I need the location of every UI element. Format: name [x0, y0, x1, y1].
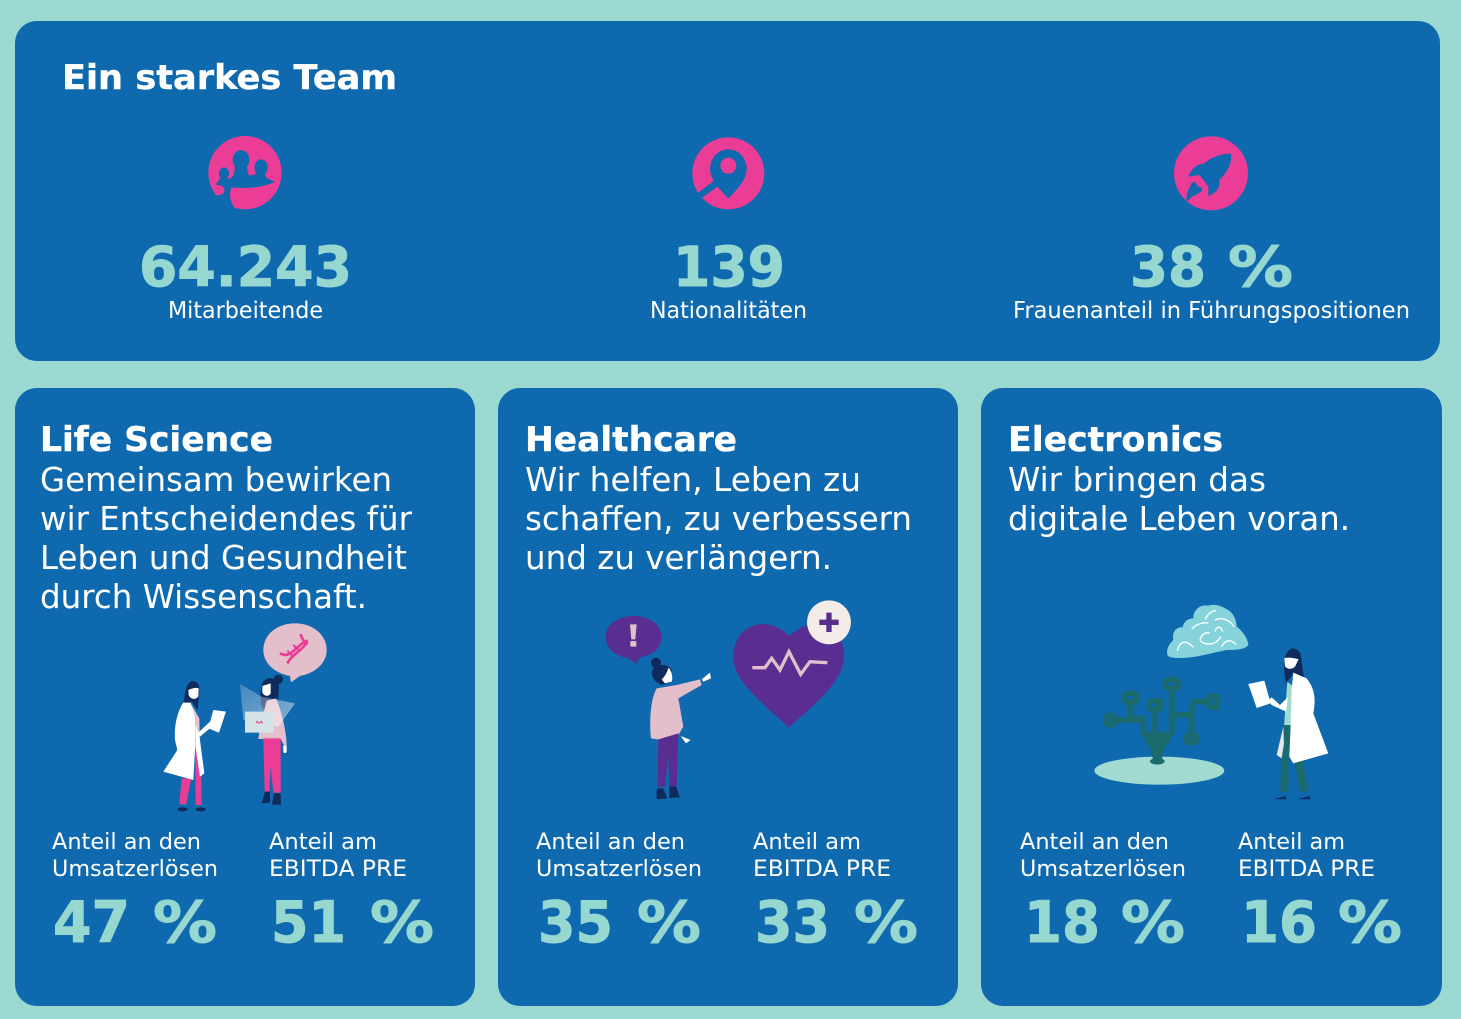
stat: EBITDA share: %: [1338, 890, 1402, 956]
stat: women in leadership: 38: [1130, 235, 1206, 299]
stat: revenue share: Umsatzerlösen: [52, 857, 218, 882]
body text: digitale Leben voran.: [1008, 499, 1350, 538]
stat: EBITDA share: 16: [1241, 890, 1317, 956]
title: Ein starkes Team: [62, 58, 397, 98]
stat: EBITDA share: Anteil am: [269, 830, 377, 855]
body text: [40, 460, 412, 616]
stat: EBITDA share: EBITDA PRE: [1238, 857, 1375, 882]
stat: nationalities: [650, 235, 807, 324]
body text: Leben und Gesundheit: [40, 538, 407, 577]
stat: EBITDA share: EBITDA PRE: [753, 857, 891, 882]
icon: rocket: [1174, 136, 1248, 210]
stat: women in leadership: [1013, 235, 1410, 324]
scientist: [1248, 648, 1328, 799]
body text: schaffen, zu verbessern: [525, 499, 912, 538]
panel: electronics: [981, 388, 1442, 1006]
heading: Life Science: [40, 420, 273, 460]
illustration: scientist, circuit tree, cloud: [1094, 605, 1328, 799]
icon: location pin: [692, 137, 764, 209]
stat: EBITDA share: [269, 830, 434, 956]
panel: healthcare: [498, 388, 958, 1006]
heart with pulse: [733, 600, 851, 727]
stat: EBITDA share: 33: [755, 890, 830, 956]
scientist in coat: [163, 681, 226, 811]
stat: EBITDA share: Anteil am: [753, 830, 861, 855]
stat: EBITDA share: %: [370, 890, 434, 956]
body text: Wir helfen, Leben zu: [525, 460, 861, 499]
stat: women in leadership: %: [1228, 235, 1293, 299]
stat: revenue share: Umsatzerlösen: [536, 857, 702, 882]
cloud: [1167, 605, 1248, 658]
stat: revenue share: %: [637, 890, 701, 956]
panel: life science: [15, 388, 475, 1006]
stat: revenue share: [52, 830, 218, 956]
stat: employees: 64.243: [139, 235, 352, 299]
stat: women in leadership: Frauenanteil in Führungspositionen: [1013, 298, 1410, 324]
illustration: two scientists: [163, 623, 327, 811]
stat: revenue share: %: [153, 890, 217, 956]
stat: nationalities: Nationalitäten: [650, 298, 807, 324]
body text: [525, 460, 912, 577]
stat: nationalities: 139: [673, 235, 785, 299]
stat: EBITDA share: %: [854, 890, 918, 956]
speech bubble: [606, 616, 662, 664]
stat: revenue share: Umsatzerlösen: [1020, 857, 1186, 882]
stat: revenue share: 18: [1024, 890, 1100, 956]
body text: und zu verlängern.: [525, 538, 832, 577]
stat: revenue share: Anteil an den: [1020, 830, 1169, 855]
ground ellipse: [1094, 757, 1224, 785]
scientist with laptop: [240, 675, 295, 805]
woman: [650, 658, 711, 799]
icon: people: [208, 136, 282, 210]
heading: Electronics: [1008, 420, 1223, 460]
stat: revenue share: [1020, 830, 1186, 956]
stat: EBITDA share: [753, 830, 918, 956]
stat: EBITDA share: [1238, 830, 1402, 956]
stat: EBITDA share: 51: [271, 890, 346, 956]
speech bubble with DNA: [263, 623, 327, 682]
body text: wir Entscheidendes für: [40, 499, 412, 538]
body text: Gemeinsam bewirken: [40, 460, 392, 499]
circuit tree: [1107, 680, 1217, 765]
stat: revenue share: 35: [538, 890, 613, 956]
illustration: woman pointing at heart: [606, 600, 851, 799]
stat: revenue share: [536, 830, 702, 956]
body text: Wir bringen das: [1008, 460, 1266, 499]
stat: EBITDA share: EBITDA PRE: [269, 857, 407, 882]
body text: durch Wissenschaft.: [40, 577, 367, 616]
stat: revenue share: Anteil an den: [536, 830, 685, 855]
stat: revenue share: Anteil an den: [52, 830, 201, 855]
stat: EBITDA share: Anteil am: [1238, 830, 1345, 855]
stat: revenue share: %: [1121, 890, 1185, 956]
body text: [1008, 460, 1350, 538]
heading: Healthcare: [525, 420, 737, 460]
stat: revenue share: 47: [53, 890, 130, 956]
panel: team: [15, 21, 1440, 361]
stat: employees: Mitarbeitende: [168, 298, 323, 324]
